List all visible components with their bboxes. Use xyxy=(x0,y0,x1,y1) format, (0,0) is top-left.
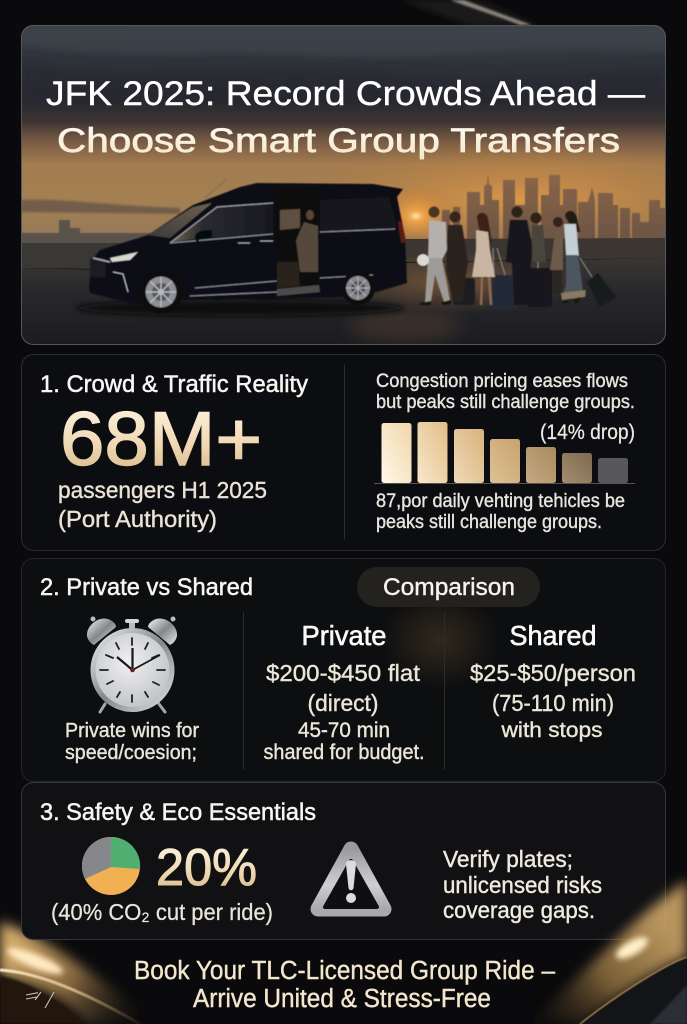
panel: hero xyxy=(21,25,687,345)
column: shared: (75-110 min) xyxy=(492,690,614,716)
column: private: 45-70 min xyxy=(298,718,390,742)
co2 caption: (40% CO₂ cut per ride) xyxy=(51,899,273,925)
daily vehicles text: 87,por daily vehting tehicles be xyxy=(376,490,625,512)
stat 20%: 20% xyxy=(156,839,257,897)
verify text: unlicensed risks xyxy=(443,872,602,898)
icon: warning triangle xyxy=(318,849,384,909)
column: shared xyxy=(470,620,636,742)
drop label: (14% drop) xyxy=(540,421,635,444)
small corner mark xyxy=(26,992,54,1008)
verify text: coverage gaps. xyxy=(443,897,595,923)
heading 3: 3. Safety & Eco Essentials xyxy=(40,799,316,826)
figure 7 white jacket xyxy=(561,211,586,303)
gold swoosh bottom right xyxy=(530,880,687,1024)
comparison pill: Comparison xyxy=(383,574,515,601)
suitcases xyxy=(453,268,616,310)
column: shared: $25-$50/person xyxy=(470,660,636,686)
gold swoosh bottom left xyxy=(0,922,155,1024)
verify text: Verify plates; xyxy=(443,846,573,872)
call to action xyxy=(134,957,556,1013)
sun glow xyxy=(398,194,444,239)
clock caption: Private wins for xyxy=(65,719,199,742)
icon: alarm clock xyxy=(87,616,177,712)
panel 1: crowd and traffic xyxy=(22,354,666,550)
daily vehicles text xyxy=(376,490,625,533)
stat caption: (Port Authority) xyxy=(58,506,217,532)
title: Choose Smart Group Transfers xyxy=(57,122,620,160)
bar chart xyxy=(374,422,635,484)
column: private: (direct) xyxy=(308,690,378,716)
figure 1 white shirt xyxy=(417,206,451,305)
congestion text: Congestion pricing eases flows xyxy=(376,370,628,392)
city skyline xyxy=(442,173,666,242)
roadside wall xyxy=(22,243,122,269)
comparison pill xyxy=(357,567,540,607)
verify text xyxy=(443,846,602,923)
column: shared: Shared xyxy=(510,620,596,651)
van open door xyxy=(275,188,319,292)
stat caption xyxy=(58,477,267,532)
pie chart xyxy=(82,837,140,895)
congestion text: but peaks still challenge groups. xyxy=(376,391,635,413)
figure 6 xyxy=(550,217,563,294)
van headlight and mirror xyxy=(110,252,138,262)
figure 5 xyxy=(530,212,546,262)
clock caption xyxy=(65,719,199,764)
van windows xyxy=(172,203,273,242)
column: private xyxy=(264,620,424,764)
figure 3 dress xyxy=(472,213,495,305)
congestion text xyxy=(376,370,635,413)
figure 2 dark xyxy=(446,212,468,302)
figure 4 suit xyxy=(506,206,533,305)
call to action: Arrive United & Stress-Free xyxy=(193,985,491,1013)
panel 2: private vs shared xyxy=(22,558,666,782)
gold streak top xyxy=(400,0,540,26)
call to action: Book Your TLC-Licensed Group Ride – xyxy=(134,957,556,985)
column: private: $200-$450 flat xyxy=(266,660,420,686)
van wheels xyxy=(139,270,183,314)
clock caption: speed/coesion; xyxy=(65,741,197,764)
panel 3: safety and eco xyxy=(22,782,666,940)
big stat 68M+: 68M+ xyxy=(60,397,262,482)
stat caption: passengers H1 2025 xyxy=(58,477,267,503)
heading 2: 2. Private vs Shared xyxy=(40,574,253,601)
van xyxy=(75,179,407,316)
group of travellers xyxy=(417,206,616,310)
ground xyxy=(21,258,666,345)
column: private: Private xyxy=(302,620,386,651)
van windscreen xyxy=(148,203,212,238)
sunset sky xyxy=(21,25,666,250)
daily vehicles text: peaks still challenge groups. xyxy=(376,511,602,533)
heading 1: 1. Crowd & Traffic Reality xyxy=(40,371,308,398)
title: JFK 2025: Record Crowds Ahead — xyxy=(46,75,645,113)
column: private: shared for budget. xyxy=(264,740,424,764)
column: shared: with stops xyxy=(500,718,602,742)
title xyxy=(46,75,645,160)
